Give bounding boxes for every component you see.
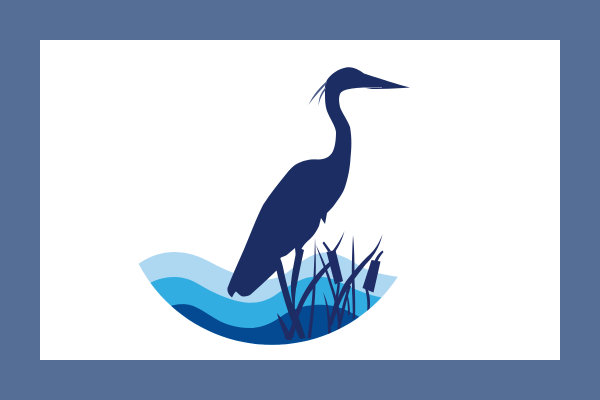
heron silhouette [227, 67, 410, 339]
heron far leg [291, 247, 304, 311]
water waves [138, 252, 398, 345]
cattail right tip [374, 250, 384, 262]
reeds and cattails [277, 231, 384, 340]
reed leaf: right low curve [346, 290, 350, 316]
cattail right stem [365, 289, 370, 311]
cattail right head [362, 260, 380, 292]
reed leaf: lower right curve [337, 285, 351, 330]
reed leaf: low left [277, 313, 292, 340]
reed leaf: long sweeping [329, 234, 382, 326]
beak highlight line [364, 86, 382, 89]
cattail left tip [322, 242, 331, 252]
wave: light blue [138, 252, 398, 345]
head plume feathers [308, 81, 327, 106]
white panel [40, 40, 560, 360]
reed leaf: right tall [352, 235, 355, 320]
reed leaf: low left short [284, 326, 292, 339]
cattail left stem [328, 283, 340, 326]
cattail left [322, 231, 344, 326]
cattail left leaf [332, 231, 344, 252]
reed leaf: inner diagonal [316, 245, 341, 324]
wave: mid blue [150, 276, 382, 345]
cattail right [362, 250, 384, 313]
reed leaf: crossing from cattail to base [290, 262, 330, 338]
heron near leg [276, 258, 306, 339]
illustration: heron logo on framed panel [40, 40, 560, 360]
cattail left head [326, 250, 343, 284]
heron body, neck and head [227, 67, 410, 298]
reed leaf: central tall [308, 238, 316, 338]
wave: dark blue [172, 304, 360, 345]
reed leaf: low centre [323, 292, 331, 336]
